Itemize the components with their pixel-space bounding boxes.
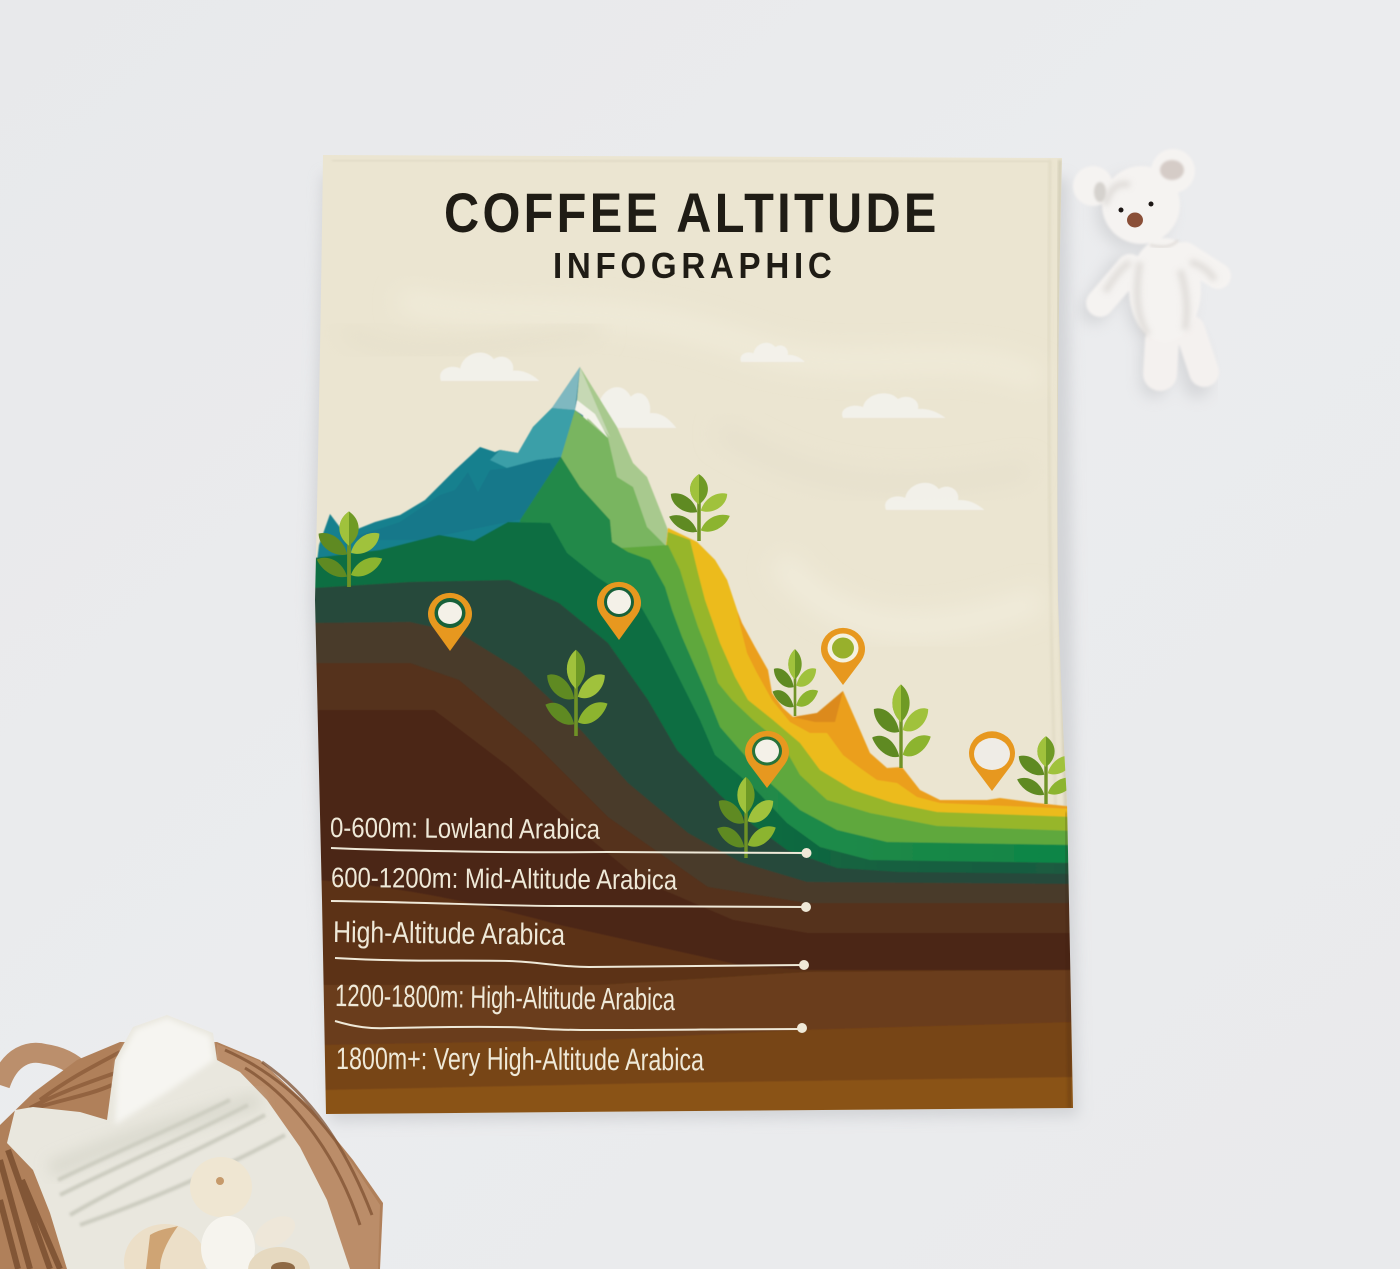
cloth — [7, 1015, 350, 1269]
map pin 3 — [821, 628, 865, 685]
wicker basket with cloth and mushrooms — [0, 1015, 383, 1269]
layer: ochre band — [326, 1077, 1073, 1114]
map pin 4 — [745, 731, 789, 788]
map pin 2 — [597, 582, 641, 640]
mushrooms — [124, 1157, 310, 1269]
layer: orange band — [600, 528, 1075, 1120]
label row: 600-1200m: 600-1200m: Mid-Altitude Arabica — [331, 862, 678, 895]
plant 1 — [317, 511, 382, 587]
basket — [0, 1042, 383, 1269]
plant 5 — [872, 684, 931, 768]
plant 7 — [1017, 736, 1066, 804]
title: COFFEE ALTITUDE — [444, 182, 936, 245]
mountain artwork — [314, 367, 1075, 1120]
layer: warm brown band — [324, 970, 1072, 1045]
label row: 0-600m: 0-600m: Lowland Arabica — [330, 812, 601, 845]
label row: high altitude: High-Altitude Arabica — [333, 916, 566, 952]
layer: grey green band — [315, 580, 1068, 884]
label row: high altitude — [333, 916, 809, 970]
plant 2 — [669, 474, 730, 541]
layer: orange shade — [793, 691, 843, 722]
label row: 1800m+: 1800m+: Very High-Altitude Arabica — [336, 1041, 705, 1077]
label row: 1200-1800m: 1200-1800m: High-Altitude Arabica — [335, 978, 676, 1017]
layer: dark green band — [315, 522, 1068, 874]
map pin 1 — [428, 593, 472, 651]
label row: 600-1200m — [331, 868, 811, 912]
clouds — [440, 343, 984, 510]
layer: green band — [520, 457, 1068, 864]
layer: mid green band — [622, 544, 1068, 846]
layer: brown band — [316, 664, 1070, 933]
layer: olive brown band — [316, 622, 1069, 903]
layer: dark brown band — [318, 710, 1070, 970]
layer: light brown band — [325, 1022, 1072, 1090]
layer: lime band — [666, 532, 1068, 832]
scene: blanket mockup with infographic — [0, 150, 1230, 1269]
plant 4 — [773, 649, 818, 716]
label row: 1200-1800m — [334, 984, 807, 1033]
map pin 5 — [969, 731, 1015, 791]
layer: yellow band — [666, 528, 1068, 817]
plant 6 — [717, 777, 776, 858]
teddy bear toy — [1073, 149, 1218, 384]
plant 3 — [545, 650, 608, 736]
label row: 0-600m — [330, 818, 812, 858]
panel: blanket poster — [314, 155, 1076, 1120]
blanket shadow — [310, 175, 1078, 1122]
mountain peak and slopes — [316, 367, 680, 570]
layer: mid brown band — [322, 880, 979, 985]
subtitle: INFOGRAPHIC — [553, 247, 832, 286]
